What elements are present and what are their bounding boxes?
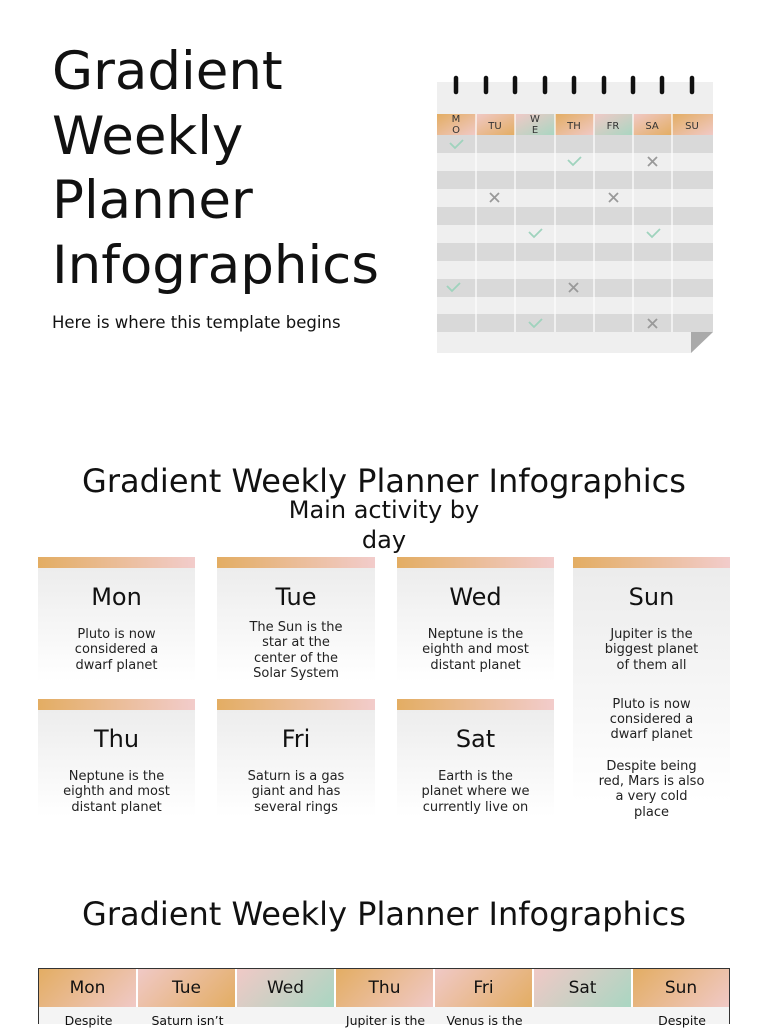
card: Sun: dwarf planet [610,727,693,742]
table: Sun [665,978,697,998]
table [38,968,730,1024]
table: Despite [65,1013,112,1028]
card: Sun: Despite being [606,759,697,774]
subheading: day [362,526,406,554]
card: Fri: Fri [282,725,310,753]
heading: section 2: Gradient Weekly Planner Infographics [82,462,686,500]
card: Wed: Neptune is the [428,627,523,642]
card: Tue: Solar System [253,666,339,681]
table: Venus is the [446,1013,523,1028]
card: Mon: considered a [75,642,158,657]
card: Thu: Neptune is the [69,769,164,784]
icon: calendar: SA [645,121,659,132]
card: Mon: Pluto is now [77,627,156,642]
card: Thu: eighth and most [63,784,170,799]
card: Sun: Pluto is now [612,697,691,712]
card: Thu: distant planet [71,800,162,815]
card: Sat: Sat [456,725,495,753]
icon: calendar: M [452,114,460,125]
title: Planner [52,170,253,231]
icon: calendar: SU [685,121,699,132]
card: Wed: Wed [449,583,502,611]
icon: calendar: O [452,125,460,136]
card: Tue: Tue [276,583,316,611]
card: Wed: distant planet [430,658,521,673]
table: Mon [70,978,105,998]
card: Mon: dwarf planet [75,658,158,673]
card: Fri: several rings [254,800,338,815]
card: Tue: center of the [254,651,338,666]
subtitle: Here is where this template begins [52,313,341,332]
card: Sun [573,557,730,802]
icon: calendar: FR [607,121,619,132]
table: Despite [658,1013,706,1028]
icon: calendar: TU [487,121,502,132]
heading: section 3: Gradient Weekly Planner Infographics [82,895,686,933]
card: Fri [217,699,375,817]
title: Weekly [52,106,243,166]
table: Thu [369,978,400,998]
card: Sun: considered a [610,712,693,727]
card: Mon [38,557,195,682]
title: Infographics [52,234,379,296]
card: Wed [397,557,554,682]
title: Gradient [52,41,283,102]
table: Tue [172,978,201,998]
subheading: Main activity by [289,496,479,524]
card: Sun: Jupiter is the [610,627,693,642]
table: Sat [569,978,596,998]
card: Sat [397,699,554,817]
card: Wed: eighth and most [422,642,529,657]
card: Tue: star at the [262,635,330,650]
card: Sun: red, Mars is also [599,774,704,789]
icon: calendar: E [532,125,538,136]
card: Thu: Thu [94,725,139,753]
table: Wed [267,978,304,998]
card: Sun: of them all [616,658,686,673]
icon: calendar: W [530,114,540,125]
card: Tue [217,557,375,682]
card: Fri: Saturn is a gas [248,769,344,784]
subheading [289,496,479,554]
table: Jupiter is the [346,1013,425,1028]
card: Sun: Sun [629,583,674,611]
icon: calendar [437,76,713,353]
card: Sat: planet where we [422,784,530,799]
card: Sun: a very cold [616,789,687,804]
table: Fri [473,978,494,998]
card: Tue: The Sun is the [249,620,343,635]
card: Sun: biggest planet [605,642,698,657]
card: Thu [38,699,195,817]
card: Sat: currently live on [423,800,528,815]
title [52,41,379,296]
card: Fri: giant and has [252,784,340,799]
text: place [634,805,669,820]
card: Sat: Earth is the [438,769,513,784]
card: Mon: Mon [91,583,142,611]
icon: calendar: TH [566,121,581,132]
table: Saturn isn’t [151,1013,224,1028]
